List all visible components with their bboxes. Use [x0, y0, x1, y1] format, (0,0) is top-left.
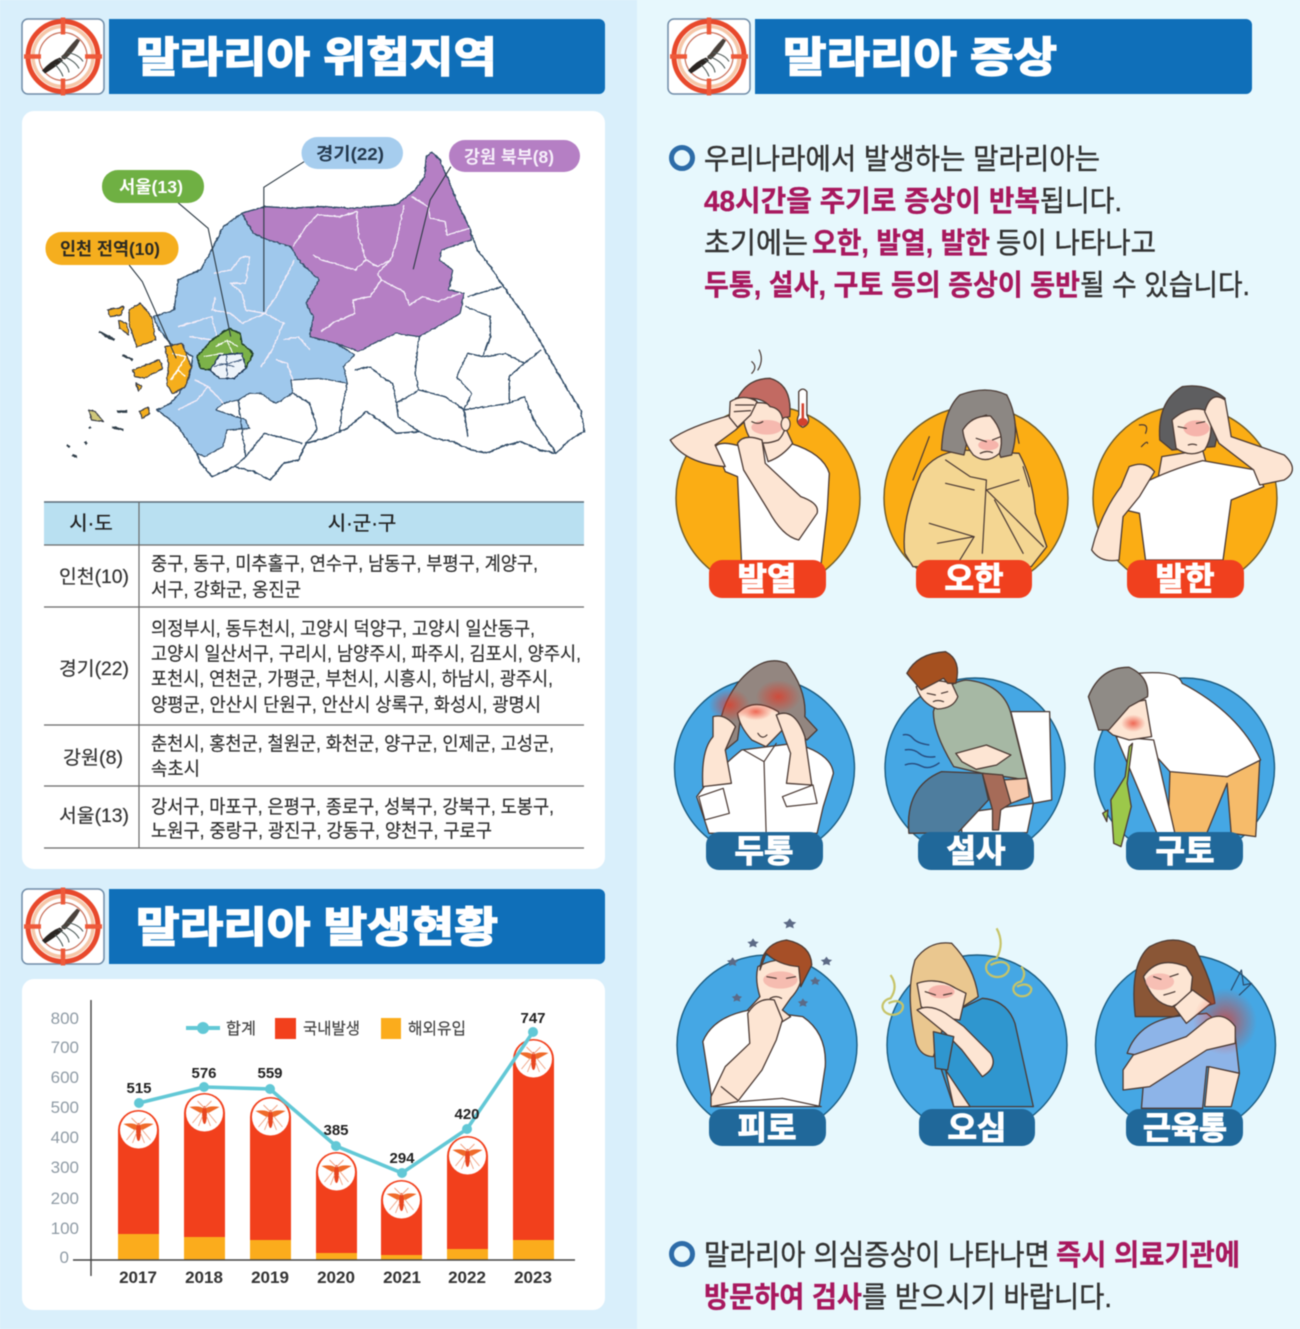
row: Gyeonggi: 고양시 일산서구, 구리시, 남양주시, 파주시, 김포시, 양주시,	[151, 643, 581, 665]
text block: symptom description: 두통, 설사, 구토 등의 증상이 동반	[704, 269, 1080, 302]
value labels: 515	[126, 1080, 152, 1097]
symptom: diarrhea	[885, 652, 1065, 858]
year labels: 2018	[185, 1268, 223, 1287]
text block: advice: 즉시 의료기관에	[1056, 1239, 1240, 1272]
heading: malaria risk areas: 말라리아 위험지역	[136, 34, 497, 81]
year labels: 2022	[448, 1268, 486, 1287]
year labels: 2019	[251, 1268, 289, 1287]
symptom: vomiting	[1088, 667, 1274, 858]
table header: 시·도	[69, 513, 113, 535]
symptom: muscle pain	[1096, 940, 1276, 1135]
row: Seoul: 서울(13)	[59, 805, 129, 827]
row: Incheon: 서구, 강화군, 옹진군	[151, 579, 301, 601]
text block: symptom description: 초기에는	[704, 228, 808, 260]
bars: domestic and imported	[118, 1039, 554, 1260]
text block: symptom description	[672, 143, 1250, 302]
label pills: red row: 오한	[945, 561, 1003, 597]
row: Gangwon: 춘천시, 홍천군, 철원군, 화천군, 양구군, 인제군, 고성군,	[151, 733, 554, 755]
symptom: chills	[884, 390, 1068, 590]
heading: malaria symptoms	[668, 18, 1252, 96]
map: Seoul, Incheon, Gyeonggi, Gangwon	[67, 152, 584, 480]
y axis labels: 100	[51, 1219, 79, 1238]
year labels: 2017	[119, 1268, 157, 1287]
value labels: 559	[257, 1065, 283, 1082]
label pills: red row: 발한	[1156, 561, 1214, 597]
heading: malaria symptoms: 말라리아 증상	[783, 34, 1057, 81]
text block: advice	[672, 1239, 1240, 1314]
row: Seoul: 노원구, 중랑구, 광진구, 강동구, 양천구, 구로구	[151, 820, 492, 842]
text block: symptom description: 됩니다.	[1040, 185, 1122, 218]
y axis labels: 800	[51, 1009, 79, 1028]
legend	[186, 1018, 466, 1039]
heading: malaria occurrence	[22, 888, 605, 966]
Seoul (green)	[197, 328, 253, 378]
value labels: 747	[520, 1010, 546, 1027]
legend: 국내발생	[303, 1020, 360, 1038]
y axis labels: 500	[51, 1098, 79, 1117]
heading: malaria occurrence: 말라리아 발생현황	[136, 904, 498, 951]
text block: symptom description: 오한, 발열, 발한	[812, 227, 990, 260]
table: risk districts: 시·군·구	[328, 513, 396, 535]
row: Incheon	[59, 553, 538, 601]
row: Gyeonggi	[59, 618, 581, 716]
label pills: red row	[709, 560, 1244, 598]
symptom: nausea	[883, 928, 1067, 1135]
label pills: second row: 설사	[947, 833, 1005, 869]
map label: Gangwon north: 강원 북부(8)	[464, 147, 554, 167]
row: Gyeonggi: 포천시, 연천군, 가평군, 부천시, 시흥시, 하남시, 광주시,	[151, 668, 553, 690]
row: Gangwon: 강원(8)	[63, 747, 123, 769]
text block: symptom description: 될 수 있습니다.	[1080, 270, 1250, 302]
row: Gangwon	[63, 733, 554, 780]
legend: 합계	[226, 1020, 256, 1038]
label pills: second row: 두통	[735, 833, 793, 869]
label pills: third row: 근육통	[1143, 1110, 1227, 1146]
label pills: second row: 구토	[1156, 833, 1214, 869]
map label: Gangwon north	[449, 140, 580, 172]
map label: Incheon	[46, 232, 178, 265]
y axis labels	[51, 1009, 79, 1267]
heading: malaria risk areas	[22, 18, 605, 96]
label pills: third row: 오심	[948, 1110, 1006, 1146]
y axis labels: 400	[51, 1128, 79, 1147]
y axis labels: 700	[51, 1038, 79, 1057]
regions with wiggly borders	[67, 152, 584, 480]
Incheon (orange)	[88, 303, 191, 422]
panel: risk area map and table	[22, 111, 605, 869]
axes	[73, 1000, 575, 1276]
y axis labels: 600	[51, 1068, 79, 1087]
row: Gyeonggi: 양평군, 안산시 단원구, 안산시 상록구, 화성시, 광명시	[151, 694, 541, 716]
small islands	[67, 332, 133, 457]
map label: Incheon: 인천 전역(10)	[60, 239, 160, 259]
y axis labels: 300	[51, 1158, 79, 1177]
value labels	[126, 1010, 546, 1167]
row: Gyeonggi: 의정부시, 동두천시, 고양시 덕양구, 고양시 일산동구,	[151, 618, 535, 640]
row: Seoul: 강서구, 마포구, 은평구, 종로구, 성북구, 강북구, 도봉구,	[151, 796, 554, 818]
table: risk districts	[44, 502, 584, 848]
value labels: 576	[191, 1065, 217, 1082]
symptom: headache	[674, 661, 854, 858]
text block: advice: 방문하여 검사	[704, 1281, 862, 1314]
year labels: 2023	[514, 1268, 552, 1287]
label pills: second row	[706, 832, 1243, 870]
mosquito badges	[120, 1040, 552, 1218]
row: Incheon: 인천(10)	[59, 566, 129, 588]
map label: Seoul	[102, 170, 204, 203]
value labels: 385	[323, 1122, 349, 1139]
text block: symptom description: 등이 나타나고	[996, 228, 1156, 260]
label pills: third row: 피로	[738, 1110, 796, 1146]
y axis labels: 0	[60, 1248, 69, 1267]
text block: symptom description: 48시간을 주기로 증상이 반복	[704, 185, 1040, 218]
symptom: fatigue	[677, 918, 857, 1135]
panel: occurrence chart	[22, 979, 605, 1310]
year labels	[119, 1268, 552, 1287]
map label: Gyeonggi	[302, 137, 403, 169]
y axis labels: 200	[51, 1189, 79, 1208]
map label: Gyeonggi: 경기(22)	[316, 144, 384, 164]
row: Gyeonggi: 경기(22)	[59, 658, 129, 680]
symptom: sweating	[1092, 386, 1292, 590]
text block: symptom description: 우리나라에서 발생하는 말라리아는	[704, 143, 1100, 176]
value labels: 420	[454, 1106, 480, 1123]
Gangwon north (purple)	[242, 152, 472, 352]
year labels: 2020	[317, 1268, 355, 1287]
year labels: 2021	[383, 1268, 421, 1287]
legend: 해외유입	[408, 1020, 466, 1038]
symptom: fever	[670, 350, 860, 590]
label pills: red row: 발열	[738, 561, 796, 597]
row: Gangwon: 속초시	[151, 758, 200, 780]
row: Incheon: 중구, 동구, 미추홀구, 연수구, 남동구, 부평구, 계양구,	[151, 553, 538, 575]
row: Seoul	[59, 796, 554, 842]
white district borders	[178, 197, 470, 410]
whole region outline	[154, 152, 584, 480]
text block: advice: 를 받으시기 바랍니다.	[862, 1281, 1112, 1314]
leader lines	[129, 162, 451, 358]
value labels: 294	[389, 1150, 415, 1167]
map label: Seoul: 서울(13)	[119, 177, 183, 197]
total line	[134, 1027, 538, 1178]
Gyeonggi (blue)	[154, 213, 355, 457]
label pills: third row	[709, 1109, 1243, 1146]
text block: advice: 말라리아 의심증상이 나타나면	[704, 1239, 1050, 1272]
south-east district lines	[234, 287, 556, 467]
